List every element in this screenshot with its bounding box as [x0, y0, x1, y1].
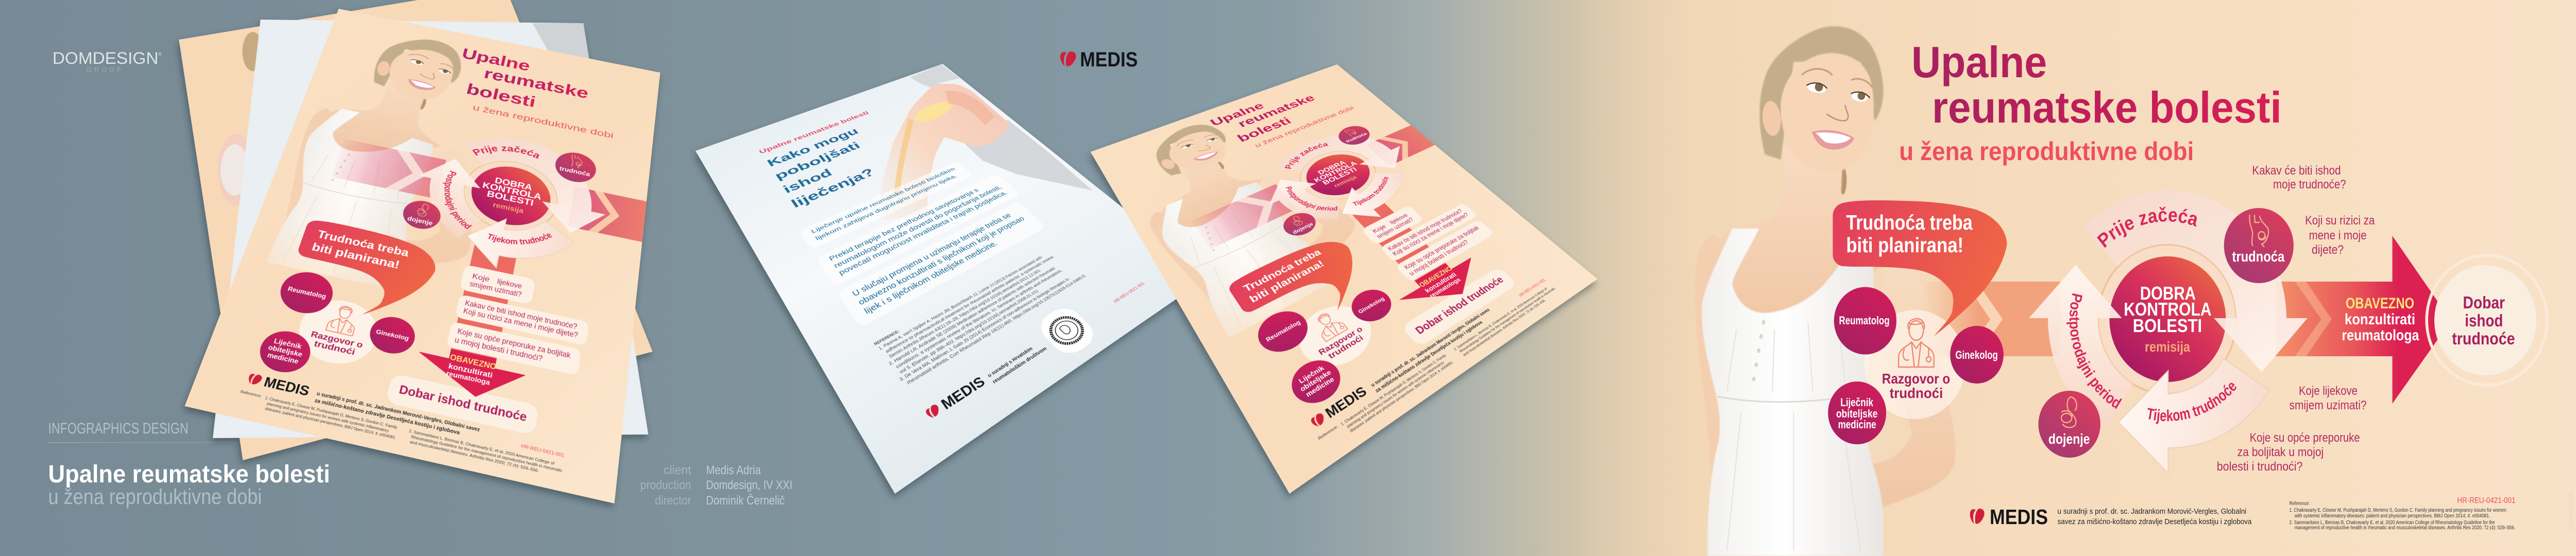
references: 1. Chakravarty E, Clowse M, Pushparajah D, Mertens S, Gordon C. Family	[199, 299, 298, 321]
references: Reference:	[2290, 501, 2310, 507]
poster kicker: Upalne reumatske bolesti	[757, 120, 945, 154]
dojenje circle: dojenje	[2048, 431, 2090, 447]
speech bubble	[1833, 200, 2007, 336]
text box 1	[799, 161, 973, 250]
question texts: dijete?	[2312, 242, 2344, 256]
Medis logo	[923, 373, 988, 423]
result pill: Dobar ishod trudnoće	[1091, 229, 1250, 256]
Liječnik obiteljske medicine circle: obiteljske	[1298, 366, 1337, 393]
DomDesign logo: DOMDESIGN	[53, 49, 158, 67]
woman photo	[1150, 125, 1355, 338]
remission cycle: DOBRA	[1283, 160, 1345, 171]
question pills: u mojoj bolesti i trudnoći?	[359, 267, 430, 286]
poster heading: Kako mogu	[748, 133, 901, 164]
outcome circle: trudnoće	[2452, 329, 2515, 348]
references: vol 5. Elsevier, pp 396–402. https://doi.org/10.1016/j.semarthrit.2008.01.011	[696, 231, 829, 264]
speech bubble	[282, 218, 442, 327]
remission cycle	[2029, 190, 2308, 473]
conversation circle with doctor icon	[1286, 295, 1385, 379]
outcome circle: Dobar	[2463, 293, 2505, 312]
question pills: Kakav će biti ishod moje trudnoće?	[1195, 193, 1352, 216]
Reumatolog circle	[1834, 287, 1896, 354]
right arrow to outcome: OBAVEZNO	[2346, 295, 2414, 312]
remission cycle: remisija	[1271, 170, 1322, 179]
question texts: smijem uzimati?	[2290, 398, 2367, 412]
Medis logo, centre top: MEDIS	[1080, 48, 1138, 71]
question pills: lijekove	[410, 230, 433, 239]
Medis logo	[1309, 384, 1370, 431]
title	[1208, 85, 1328, 148]
poster shadows	[177, 4, 1596, 507]
right arrow to outcome	[2276, 236, 2451, 404]
remission cycle	[1262, 135, 1403, 219]
collaboration note: za mišićno-koštano zdravlje Desetljeća kostiju i zglobova	[1091, 249, 1155, 276]
question pills: u mojoj bolesti i trudnoći?	[1170, 211, 1291, 229]
Reumatolog circle	[275, 268, 338, 318]
Liječnik obiteljske medicine circle: medicine	[206, 273, 232, 282]
down arrow with consult text: konzultirati	[1154, 227, 1216, 237]
remission cycle: Postporodajni period	[443, 170, 452, 215]
title: reumatske	[1310, 106, 1490, 136]
references	[235, 390, 564, 479]
text box 2: povećati mogućnost invaliditeta i trajnih posljedica.	[696, 179, 945, 224]
remission cycle: Postporodajni period	[1285, 186, 1293, 198]
text box 3: U slučaju promjena u uzimanju terapije treba se	[696, 192, 912, 234]
right arrow to outcome: konzultirati	[2345, 311, 2415, 328]
woman photo	[267, 39, 471, 287]
text box 2	[816, 173, 1020, 286]
references: diseases: patient and physician perspectives. BMJ Open 2014; 4: e004081.	[198, 305, 295, 327]
trudnoća circle: trudnoća	[2232, 248, 2285, 265]
arc arrow: postpartum	[2029, 265, 2132, 430]
references: Rheumatology Guideline for the management of reproductive health in rheumatic	[305, 324, 415, 349]
references: REFERENCE:	[873, 326, 905, 346]
Medis logo: MEDIS	[198, 287, 238, 302]
Liječnik obiteljske medicine circle	[1828, 381, 1886, 444]
references	[1317, 283, 1560, 451]
trudnoća circle: trudnoća	[1392, 139, 1444, 148]
references: planning and pregnancy issues for women with systemic inflammatory	[200, 303, 291, 323]
right arrow to outcome: reumatologa	[2342, 327, 2419, 344]
outcome circle	[2427, 255, 2547, 385]
references: 1. Chakravarty E, Clowse M, Pushparajah D, Mertens S, Gordon C. Family	[1340, 347, 1456, 426]
speech bubble: biti planirana!	[1091, 219, 1118, 240]
question texts: Koji su rizici za	[2305, 213, 2375, 227]
subtitle: u žena reproduktivne dobi	[1279, 117, 1504, 151]
white poster sheet with shoulder illustration	[696, 64, 1209, 494]
poster heading: ishod	[728, 163, 806, 181]
collaboration note: reumatološkim društvom	[696, 254, 769, 268]
dojenje circle	[2038, 391, 2100, 458]
title: Upalne	[1281, 112, 1405, 135]
references: and musculoskeletal diseases. Arthritis Res 2020; 72 (4): 529–556.	[303, 327, 397, 348]
conversation circle with doctor icon: Razgovor o	[1882, 371, 1950, 387]
title: reumatske	[462, 63, 567, 97]
references: management of reproductive health in rheumatic and musculoskeletal diseases. Arthritis Res 2020; 72 (4): 529–556.	[2295, 525, 2515, 531]
title: Upalne	[447, 45, 520, 72]
outcome circle: ishod	[2465, 311, 2503, 330]
question pills: lijekove	[1249, 195, 1288, 202]
remission cycle: DOBRA	[2140, 284, 2196, 304]
question texts	[2217, 163, 2375, 473]
speech bubble	[1226, 231, 1382, 350]
references: 2. Harrold LR, Andrade SE (2009) Medication adherence of patients with selected rheumatic	[696, 220, 873, 261]
question pills: Kakav će biti ishod moje trudnoće?	[377, 244, 468, 267]
remission cycle: KONTROLA	[2124, 300, 2212, 320]
disease control circle	[2109, 256, 2226, 382]
Liječnik obiteljske medicine circle: Liječnik	[213, 265, 237, 273]
Liječnik obiteljske medicine circle: medicine	[1304, 372, 1341, 399]
references: Reference:	[184, 295, 198, 301]
credits: director	[655, 493, 691, 507]
down arrow with consult text	[1394, 252, 1491, 321]
Medis logo: MEDIS	[1990, 506, 2048, 529]
question texts: moje trudnoće?	[2273, 177, 2346, 191]
credits: Domdesign, IV XXI	[706, 478, 792, 492]
collaboration note	[2058, 508, 2252, 526]
question texts: bolesti i trudnoći?	[2217, 459, 2302, 473]
credits	[640, 463, 792, 507]
collaboration note: u suradnji s prof. dr. sc. Jadrankom Morović-Vergles, Globalni savez	[240, 297, 362, 324]
conversation circle with doctor icon: trudnoći	[1327, 334, 1365, 361]
dojenje circle: dojenje	[1137, 199, 1178, 206]
Ginekolog circle	[1344, 284, 1399, 328]
Liječnik obiteljske medicine circle: medicine	[1838, 419, 1876, 431]
trudnoća circle	[1333, 123, 1376, 149]
question pills: smijem uzimati?	[1208, 197, 1284, 210]
references: 2. Sammaritano L, Bermas B, Chakravarty E, et al. 2020 American College of	[304, 321, 411, 344]
references: 3. De Vera MA, Mailman J, Galo JS (2014) Economics of non-adherence to biologic therapies in	[696, 226, 870, 267]
arc arrow: during pregnancy	[2119, 358, 2269, 473]
down arrow with consult text: OBAVEZNO	[351, 277, 391, 290]
text box 1: Liječenje upalne reumatske bolesti biološkim	[704, 163, 933, 203]
remission cycle: DOBRA	[437, 157, 474, 170]
main subtitle: u žena reproduktivne dobi	[1899, 137, 2194, 166]
remission cycle: remisija	[2145, 339, 2191, 355]
down arrow with consult text: reumatologa	[1149, 230, 1209, 240]
references: with systemic inflammatory diseases: patient and physician perspectives. BMJ Open 2014; 4: e004081.	[2294, 513, 2490, 519]
credits: client	[664, 463, 691, 477]
Ginekolog circle: Ginekolog	[297, 261, 325, 270]
remission cycle: BOLESTI	[2133, 316, 2202, 336]
DomDesign logo: GROUP	[87, 66, 122, 74]
society seal	[1033, 303, 1100, 359]
result pill: Dobar ishod trudnoće	[303, 294, 403, 321]
speech bubble: Trudnoća treba	[1846, 211, 1973, 234]
down arrow with consult text: OBAVEZNO	[1158, 224, 1224, 235]
speech bubble: biti planirana!	[1846, 234, 1963, 257]
Liječnik obiteljske medicine circle	[254, 327, 316, 377]
trudnoća circle	[2224, 208, 2294, 283]
question texts: mene i moje	[2309, 228, 2367, 242]
Reumatolog circle	[1250, 304, 1316, 360]
poster: Kako mogu poboljšati ishod liječenja	[696, 111, 1145, 418]
vertical band	[1352, 200, 1452, 288]
question texts: Koje su opće preporuke	[2250, 430, 2360, 444]
collaboration note: za mišićno-koštano zdravlje Desetljeća kostiju i zglobova	[237, 301, 346, 326]
document code: HR-REU-0621-001	[875, 228, 927, 238]
Liječnik obiteljske medicine circle: obiteljske	[1836, 408, 1878, 420]
DomDesign logo	[53, 49, 162, 74]
question texts: Koje lijekove	[2299, 384, 2358, 397]
remission cycle: Prije začeća	[2097, 207, 2197, 248]
document code: HR-REU-0421-001	[388, 331, 421, 341]
left band with chevron	[1922, 282, 2061, 356]
Liječnik obiteljske medicine circle: obiteljske	[208, 268, 236, 278]
references	[2290, 501, 2515, 531]
remission cycle: Tijekom trudnoće	[1352, 185, 1379, 206]
conversation circle with doctor icon	[291, 293, 385, 371]
remission cycle	[419, 137, 606, 269]
poster heading	[761, 126, 893, 211]
question pills: smijem uzimati?	[386, 232, 431, 245]
references: and musculoskeletal diseases. Arthritis Res 2020; 72 (4): 529–556.	[1091, 241, 1246, 264]
references: Reference:	[1317, 424, 1339, 441]
references: Semin Arthritis Rheum 43(1):18–28, https://doi.org/10.1016/j.semarthrit.2012.12.001	[696, 222, 857, 258]
dojenje circle: dojenje	[348, 185, 373, 194]
Reumatolog circle: Reumatolog	[232, 232, 265, 242]
remission cycle: Tijekom trudnoće	[488, 233, 498, 237]
collaboration note: u suradnji s Hrvatskim	[696, 254, 758, 266]
poster heading: poboljšati	[738, 144, 878, 172]
question pills: Koje su opće preporuke za boljitak	[1176, 202, 1331, 226]
question pills: Koji su rizici za mene i moje dijete?	[1190, 195, 1349, 219]
document code: HR-REU-0421-001	[1228, 231, 1285, 240]
category label: INFOGRAPHICS DESIGN	[48, 420, 189, 437]
remission cycle: Postporodajni period	[2066, 293, 2122, 409]
speech bubble: Trudnoća treba	[1091, 213, 1136, 235]
remission cycle: BOLESTI	[1266, 165, 1341, 178]
remission cycle: Tijekom trudnoće	[2147, 383, 2236, 424]
document code: HR-REU-0421-001	[2457, 496, 2515, 505]
main title	[1911, 38, 2282, 132]
vertical band	[449, 244, 517, 369]
credits: Medis Adria	[706, 463, 761, 477]
question pills: Koje su opće preporuke za boljitak	[364, 262, 454, 285]
remission cycle: remisija	[429, 176, 459, 186]
main title: reumatske bolesti	[1932, 83, 2282, 132]
speech bubble: Trudnoća treba	[265, 194, 346, 217]
question pills: Koje	[1215, 201, 1244, 207]
question pills: Koji su rizici za mene i moje dijete?	[374, 249, 466, 272]
text box 3: lijek i s liječnikom obiteljske medicine.	[696, 207, 858, 241]
back white poster	[213, 20, 648, 438]
poster: front Upalne reumatske bolesti mockup	[184, 9, 660, 503]
remission cycle: KONTROLA	[1262, 161, 1355, 176]
project title: Upalne reumatske bolesti	[48, 460, 330, 488]
Ginekolog circle: Ginekolog	[1091, 238, 1110, 246]
text box 2: Prekid terapije bez prethodnog savjetovanja s	[696, 177, 921, 217]
references: 2. Sammaritano L, Bermas B, Chakravarty E, et al. 2020 American College of Rheumatology Guideline for the	[2290, 520, 2495, 526]
references: conditions: a systematic review of the literature. In: Seminars in arthritis and rheumatism,	[696, 222, 876, 263]
back peach poster	[179, 0, 653, 460]
dojenje circle	[1278, 208, 1321, 240]
collaboration note: savez za mišićno-koštano zdravlje Desetljeća kostiju i zglobova	[2058, 518, 2252, 526]
Liječnik obiteljske medicine circle	[1283, 352, 1349, 412]
Reumatolog circle: Reumatolog	[1265, 316, 1308, 343]
references: 1. Pasma A, van't Spijker A, Hazes JM, Busschbach JJ, Luime JJ (2013) Factors associated with	[696, 215, 877, 255]
collaboration note: u suradnji s prof. dr. sc. Jadrankom Morović-Vergles, Globalni savez	[1091, 244, 1182, 274]
question pills: Koje	[390, 227, 408, 234]
text box 1: lijekom zahtijeva dugotrajnu primjenu lijeka.	[700, 168, 923, 207]
references: planning and pregnancy issues for women with systemic inflammatory	[1346, 353, 1455, 429]
text box 2: reumatologom može dovesti do pogoršanja bolesti,	[696, 175, 948, 221]
references: 2. Sammaritano L, Bermas B, Chakravarty E, et al. 2020 American College of	[1091, 235, 1269, 262]
question texts: Kakav će biti ishod	[2252, 163, 2341, 177]
down arrow with consult text: reumatologa	[345, 288, 381, 299]
arc arrow: before conception	[2083, 190, 2308, 372]
print code: DC10.01V XXI	[2568, 492, 2574, 529]
Medis logo	[246, 371, 311, 399]
Reumatolog circle: Reumatolog	[1839, 315, 1890, 327]
collaboration note: u suradnji s prof. dr. sc. Jadrankom Morović-Vergles, Globalni	[2058, 508, 2246, 516]
conversation circle with doctor icon: trudnoći	[1890, 385, 1943, 401]
dojenje circle	[400, 198, 444, 232]
title: bolesti	[1273, 125, 1396, 148]
Liječnik obiteljske medicine circle: Liječnik	[1840, 396, 1873, 409]
conversation circle with doctor icon	[1865, 310, 1965, 419]
Medis logo: MEDIS	[938, 371, 992, 413]
trudnoća circle	[553, 149, 598, 186]
references: rheumatoid arthritis. Curr Rheumatol Rep 16(11):460. https://doi.org/10.1007/s11926-014-0460-5	[696, 224, 888, 268]
subtitle: u žena reproduktivne dobi	[440, 97, 572, 130]
horizontal band arrows	[1191, 125, 1435, 249]
project subtitle: u žena reproduktivne dobi	[48, 484, 262, 509]
credits: Dominik Černelič	[706, 493, 785, 507]
credits: production	[640, 478, 691, 492]
question pills	[1361, 187, 1497, 283]
references: diseases: patient and physician perspectives. BMJ Open 2014; 4: e004081.	[1349, 352, 1466, 433]
text box 3: obavezno konzultirati s liječnikom koji je propisao	[696, 194, 919, 238]
references: 1. Chakravarty E, Clowse M, Pushparajah D, Mertens S, Gordon C. Family planning and pregnancy issues for women	[2290, 508, 2506, 513]
remission cycle: KONTROLA	[425, 160, 480, 177]
Ginekolog circle	[1950, 326, 2004, 384]
question texts: za boljitak u mojoj	[2238, 445, 2324, 459]
DomDesign logo: ®	[158, 51, 162, 57]
poster heading: liječenja?	[718, 163, 849, 189]
title: bolesti	[438, 77, 511, 104]
conversation circle with doctor icon: Razgovor o	[1317, 323, 1367, 357]
down arrow with consult text: konzultirati	[348, 283, 385, 294]
conversation circle with doctor icon: Razgovor o	[243, 260, 287, 274]
poster: tilted Upalne reumatske bolesti mockup	[1091, 64, 1597, 494]
remission cycle: BOLESTI	[426, 166, 470, 182]
trudnoća circle: trudnoća	[503, 149, 533, 160]
Ginekolog circle: Ginekolog	[1955, 349, 1998, 361]
horizontal band arrows	[331, 139, 647, 242]
conversation circle with doctor icon: trudnoći	[244, 266, 279, 278]
remission cycle: Prije začeća	[1284, 143, 1329, 169]
references: adherence to pharmaceutical treatment for rheumatoid arthritis patients: a systematic review.	[696, 215, 888, 257]
down arrow with consult text	[411, 342, 528, 407]
woman photo	[1695, 26, 1955, 556]
question pills	[446, 265, 594, 376]
remission cycle: Prije začeća	[472, 146, 516, 155]
Liječnik obiteljske medicine circle: Liječnik	[1297, 362, 1329, 385]
speech bubble: biti planirana!	[258, 202, 334, 224]
Ginekolog circle	[366, 313, 419, 358]
references: Rheumatology Guideline for the management of reproductive health in rheumatic	[1091, 236, 1277, 263]
result pill	[385, 373, 539, 436]
Medis logo: MEDIS	[1323, 381, 1374, 421]
main title: Upalne	[1911, 38, 2047, 87]
title	[451, 46, 592, 121]
